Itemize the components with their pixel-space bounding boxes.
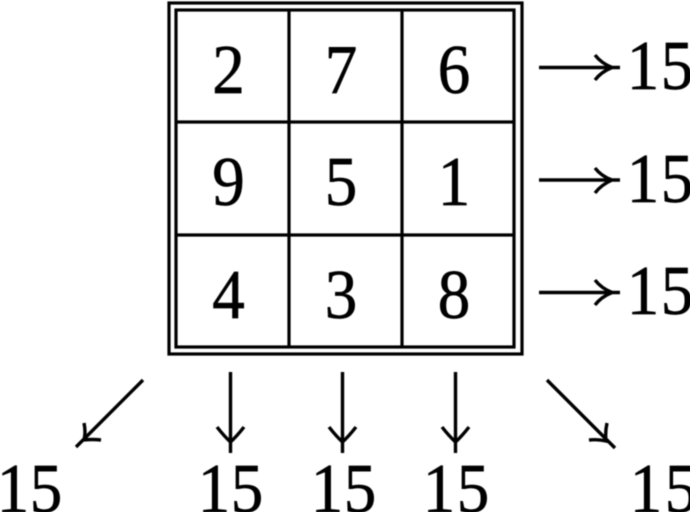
square numbers: 8 [438, 256, 470, 334]
square numbers: 5 [325, 143, 357, 220]
square numbers: 4 [212, 256, 245, 334]
square numbers: 9 [212, 143, 245, 220]
column and diagonal sums [0, 450, 690, 512]
square numbers: 6 [438, 31, 470, 109]
square numbers: 2 [212, 31, 245, 109]
row arrows [539, 55, 620, 305]
row sums [627, 27, 690, 330]
square numbers [212, 31, 470, 334]
square numbers: 3 [325, 256, 357, 334]
square numbers: 1 [438, 143, 470, 220]
column and diagonal arrows [76, 372, 615, 453]
magic square grid [169, 3, 522, 354]
square numbers: 7 [325, 31, 357, 109]
